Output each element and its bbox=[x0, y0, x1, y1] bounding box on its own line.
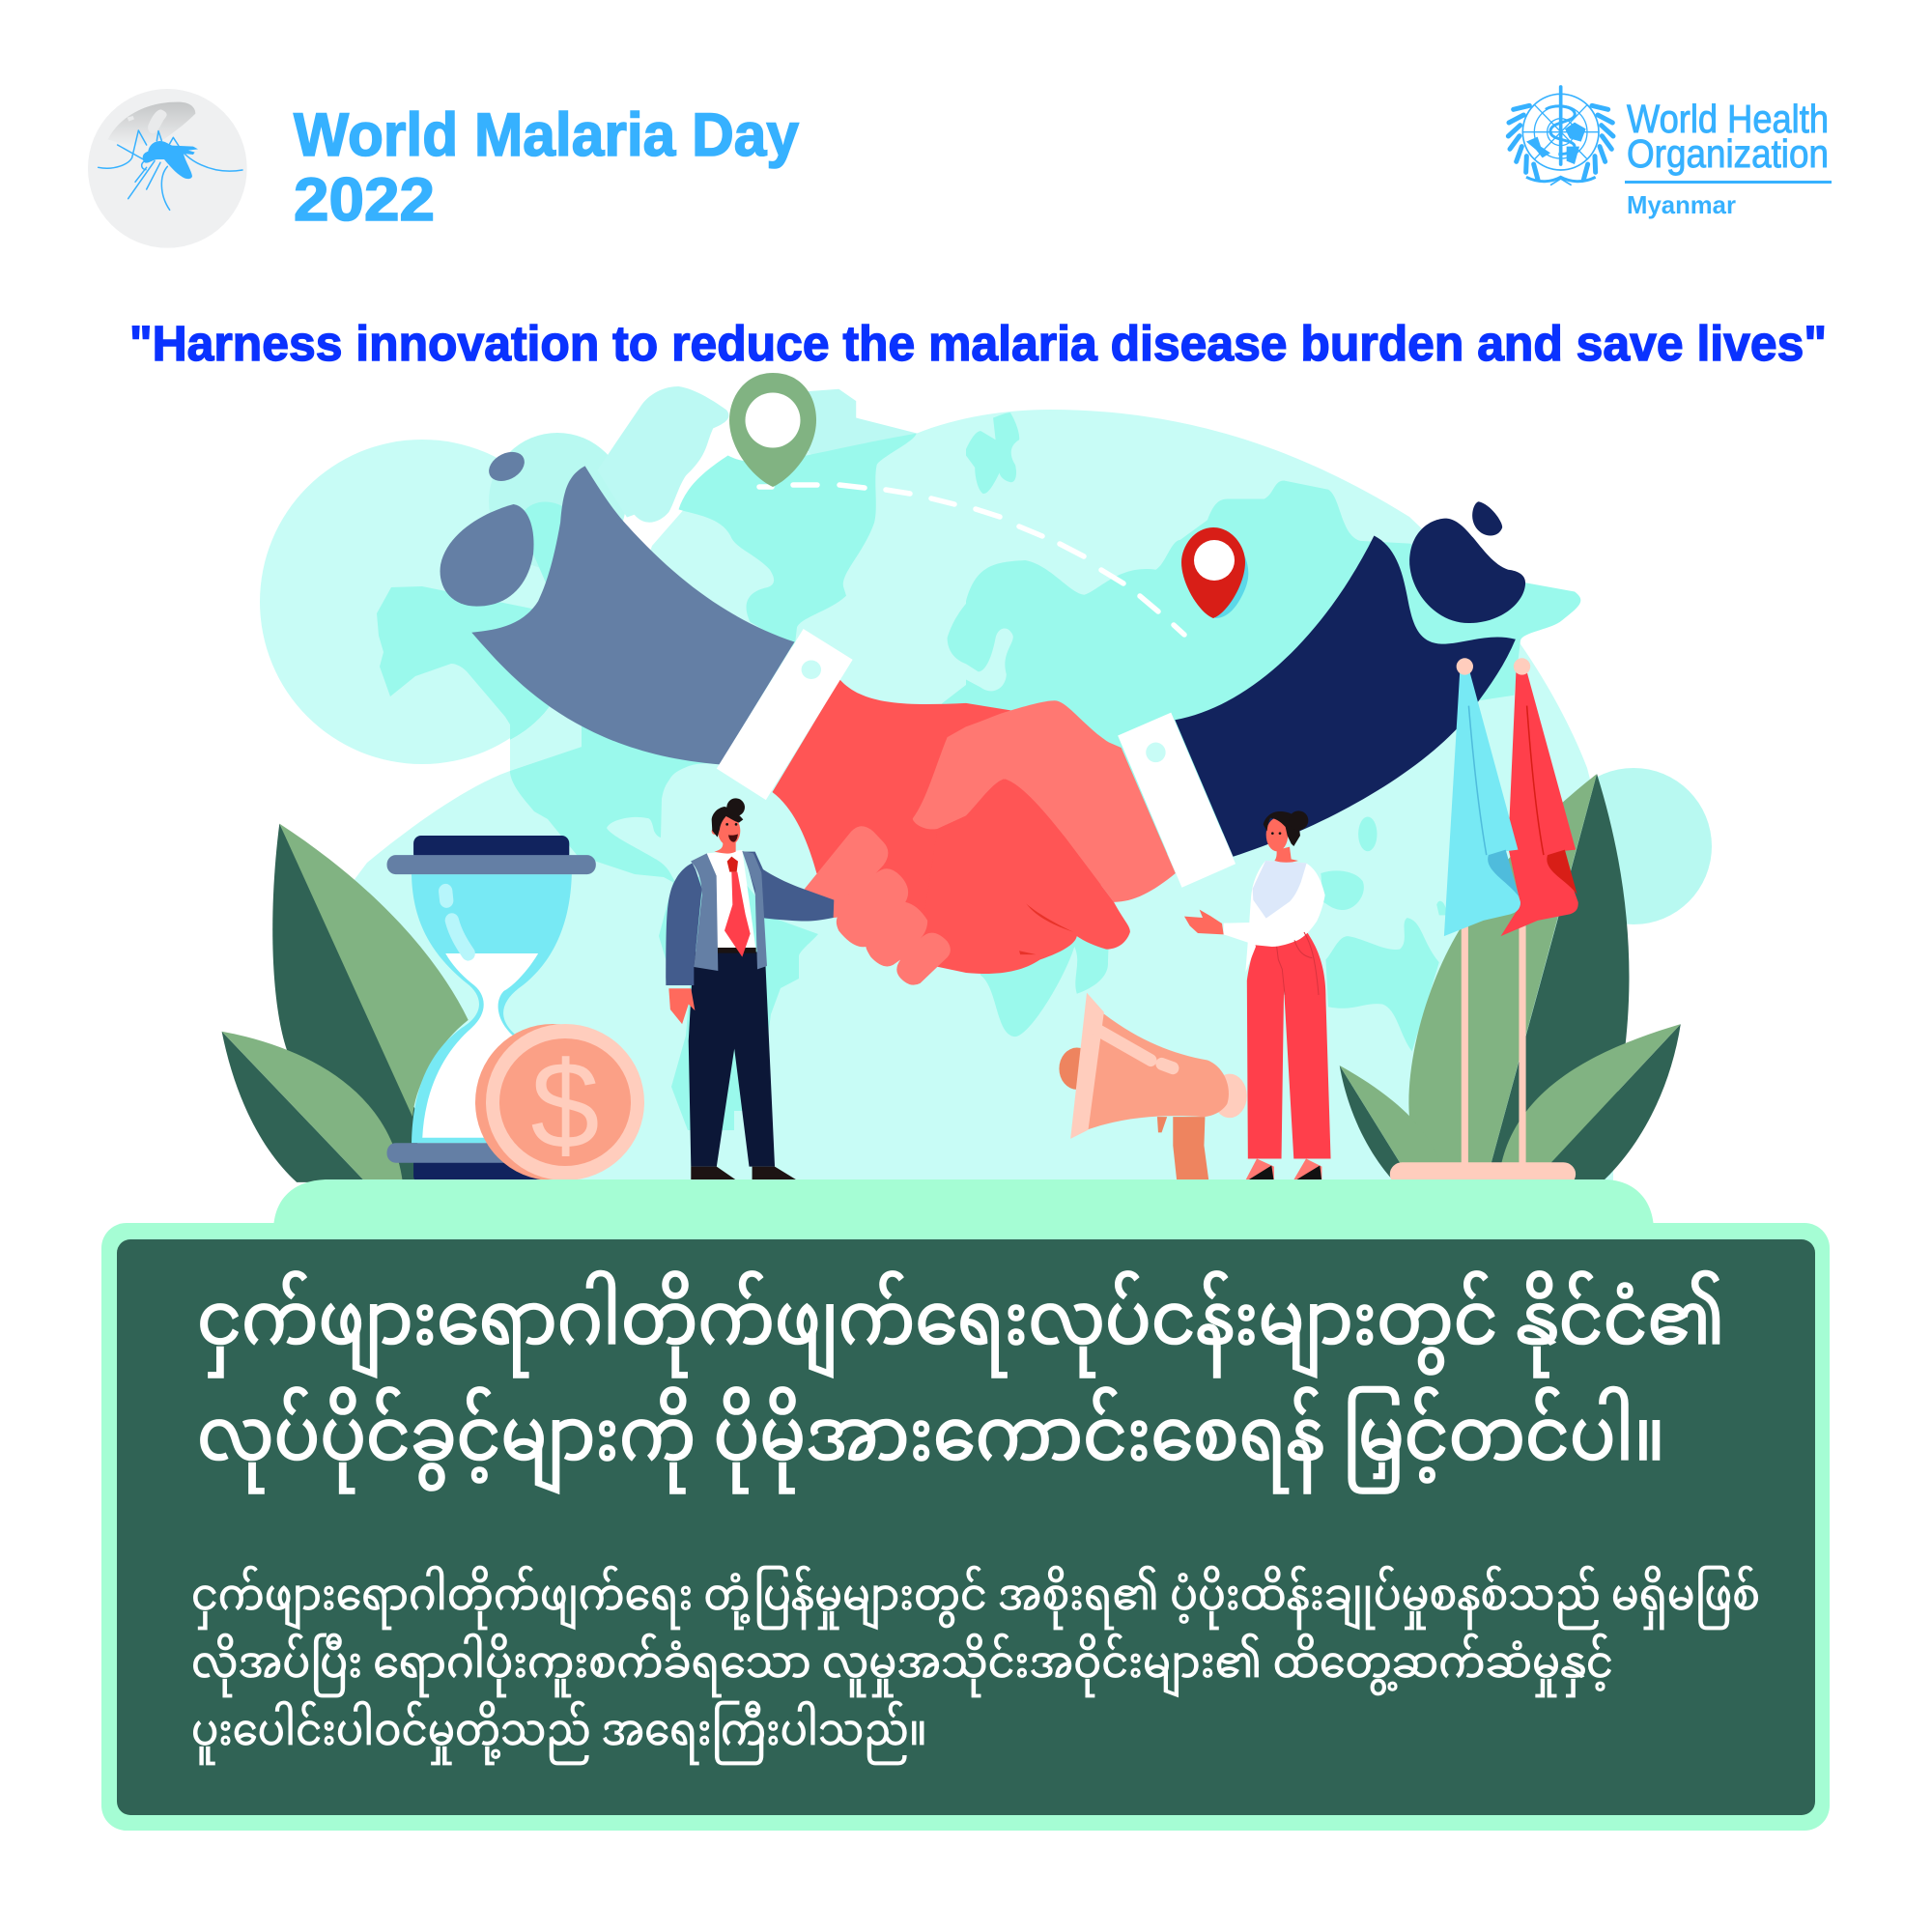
logo: mosquito on globe bbox=[88, 89, 247, 248]
logo text: World Health Organization Myanmar bbox=[1625, 97, 1832, 219]
icon: red location pin bbox=[1181, 527, 1248, 618]
icon: dollar coin bbox=[475, 1024, 644, 1180]
illustration: dark continents right bbox=[966, 412, 1580, 1051]
thumb side red bbox=[917, 779, 1130, 974]
logo text: World Health Organization Myanmar: World Health bbox=[1627, 97, 1829, 141]
title: World Malaria Day 2022 bbox=[294, 101, 799, 234]
trousers and shoes bbox=[1244, 931, 1331, 1182]
illustration: globe background bbox=[260, 386, 1712, 1183]
heading text: လုပ်ပိုင်ခွင့်များကို ပိုမိုအားကောင်းစေရန် မြှင့်တင်ပါ။ bbox=[197, 1364, 1665, 1522]
slogan: "Harness innovation to reduce the malaria disease burden and save lives" bbox=[129, 316, 1827, 371]
title: World Malaria Day 2022: 2022 bbox=[294, 166, 435, 234]
heading text bbox=[197, 1248, 1725, 1522]
icon: megaphone bbox=[1059, 993, 1247, 1182]
body text: ပူးပေါင်းပါဝင်မှုတို့သည် အရေးကြီးပါသည်။ bbox=[191, 1687, 927, 1782]
left hand red bbox=[772, 680, 1105, 970]
trousers and shoes bbox=[668, 892, 874, 1182]
ground strip bbox=[273, 1179, 1654, 1232]
torso and head bbox=[666, 798, 834, 985]
handshake bbox=[772, 680, 1176, 985]
icon: green location pin bbox=[729, 373, 816, 487]
left plants bbox=[222, 824, 469, 1182]
right hand light bbox=[913, 700, 1176, 902]
flags on poles bbox=[1390, 658, 1578, 1186]
title: World Malaria Day 2022: World Malaria Day bbox=[294, 101, 799, 169]
right shirt cuff bbox=[1118, 713, 1236, 888]
body text: လိုအပ်ပြီး ရောဂါပိုးကူးစက်ခံရသော လူမှုအသိုင်းအဝိုင်းများ၏ ထိတွေ့ဆက်ဆံမှုနှင့် bbox=[191, 1619, 1613, 1715]
right plants bbox=[1340, 774, 1681, 1182]
light continents bbox=[597, 386, 918, 523]
left shirt cuff bbox=[717, 629, 853, 800]
illustration: dark continents left bbox=[377, 434, 966, 1130]
left arm: sleeve and cuff bbox=[440, 446, 794, 764]
route: dashed flight path bbox=[759, 485, 1184, 635]
icon: dollar coin: $ bbox=[530, 1037, 600, 1175]
fingers bbox=[805, 826, 951, 985]
hourglass bbox=[387, 836, 596, 1182]
heading text: ငှက်ဖျားရောဂါတိုက်ဖျက်ရေးလုပ်ငန်းများတွင် နိုင်ငံ၏ bbox=[197, 1248, 1725, 1406]
woman in red trousers bbox=[1184, 810, 1331, 1182]
body text: ငှက်ဖျားရောဂါတိုက်ဖျက်ရေး တုံ့ပြန်မှုများတွင် အစိုးရ၏ ပံ့ပိုးထိန်းချုပ်မှုစနစ်သည် မရှိမဖြစ် bbox=[191, 1551, 1760, 1647]
logo text: World Health Organization Myanmar: Organization bbox=[1627, 131, 1829, 176]
torso and head bbox=[1184, 810, 1325, 995]
logo text: World Health Organization Myanmar: Myanmar bbox=[1627, 190, 1736, 219]
logo: WHO emblem bbox=[1508, 87, 1613, 185]
body text bbox=[191, 1551, 1760, 1782]
right arm: sleeve bbox=[1175, 501, 1525, 857]
panel: Myanmar message bbox=[101, 1223, 1830, 1831]
man in suit bbox=[666, 798, 874, 1182]
